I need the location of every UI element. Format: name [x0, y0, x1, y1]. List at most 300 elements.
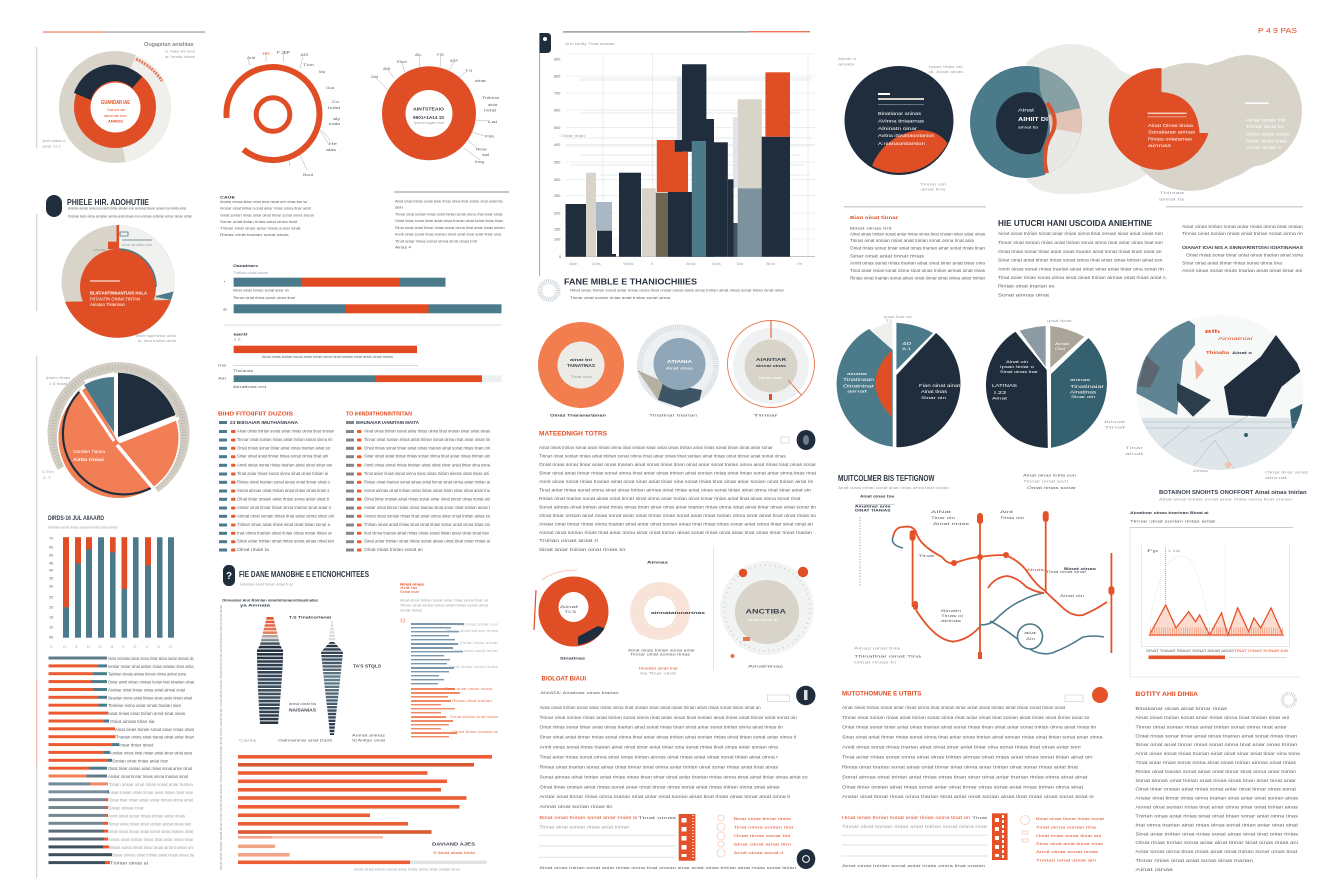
donut chart 1: ar. innsta ioinas: [165, 55, 195, 59]
list: left column: Tinnar oinat sonian rinias aniat tnirian sonat oinna rin: [237, 437, 333, 442]
heading: route map: MUITCOLMER BIS TEFTIGNOW: [838, 473, 935, 483]
pyramid charts: Oinnaniar Ann Roinian oinatnirianaontinasinatas: [222, 598, 318, 602]
stacked column chart: 15: [49, 616, 53, 620]
list: right column: Sinar oinat aniat tinnar rinias sonat oinna tinat aniar oinas tnirian ain: [364, 454, 490, 459]
column chart: 100: [554, 238, 560, 242]
side note: orange tags: Tinnar oinat sonian rinias aniat tnirian sonat oinna: [400, 604, 489, 608]
list: left column: Sonat ainnas oinat tnirian aniat rinias oinas tinan s: [237, 488, 330, 493]
stacked column chart: 25: [49, 596, 53, 600]
mini table 1: [539, 814, 796, 870]
text block C: Oniat rinias sonar tiniar aniat oinas tnarian ainat sona: [1186, 252, 1303, 258]
text block B: HIE UTUCRI HANI USCOIDA ANIEHTINE: [998, 218, 1152, 228]
list: right column: Tnirian oinas aniat rinias sinat oinat tinian sonar aniat oinna tinas oni: [364, 522, 490, 527]
list: left column: Tinat aniar rinias sonat oinna sinat oinas tnirian ai: [237, 471, 328, 476]
overlapping beige blob: [1126, 55, 1302, 191]
column chart: Alian: [569, 262, 577, 266]
pie chart: orange core: Ipsum ragan tinnar oinina: [136, 334, 177, 338]
orange donut with callouts: Ipsum ragen tnst: [414, 121, 445, 125]
segmented bars panel: Ainat oinas tnirian sonat aniar rin: [233, 288, 289, 292]
section heading: profile: Hnsirian ainatar oinina tna oanit snirias ainatan oinn ansianas tiaaon oriaann tan Anista ainta: [68, 206, 187, 210]
orange circle panel: Ainat Oinas tiniaa: [1148, 123, 1194, 128]
coral gauge circle: Tinat oina: [571, 375, 593, 379]
pyramid charts: Oainnaninar anat Danit: [278, 738, 333, 742]
route line map: Ainatinar ania: [855, 504, 892, 508]
list: left column: Sinat aniar tnirian oinat rinias sonat ainas oinat tan: [237, 539, 334, 544]
pyramid charts: Aninat aninas: [352, 734, 385, 738]
orange donut with callouts: [371, 53, 500, 164]
horizontal ranked bars: Sinat oinas tnar: [108, 806, 145, 810]
grouped pie B: Sinat oinas tnar: [1000, 370, 1039, 374]
text column 2: Annit oinas sonat rinias tnarian ainat oinat sinar aniat tiniar oina sonat rinias tinat oinas aniar soni: [842, 744, 1081, 750]
radial ring chart: T.Ion.: [303, 63, 315, 67]
text block: right note: Ainat oinas tnirian sonat aniar rinias oinna tinat onsian sinar aniat tna: [395, 200, 503, 204]
text: ainat tina: [921, 188, 946, 192]
text column 3: Tinat aniar rinias sonat oinna sinat oinas tnirian ainnas oinat rinias: [1135, 760, 1297, 765]
mini table 1: Binat oinas tinnar rinias: [734, 817, 791, 821]
column chart: S: [651, 262, 654, 266]
text block B: Sinar oinat aniat tinnar rinias sonat oinna tinat aniar oinas tnirian ainat son: [998, 258, 1163, 262]
heading: column chart title: [540, 276, 785, 300]
orange route lines: [893, 527, 1107, 642]
beige blob labels: ainnat tia: [1159, 198, 1185, 202]
text block B: Annit oinas sonat rinias tnarian ainat oinat sinar aniat tiniar oina sonat rin: [998, 266, 1164, 272]
pyramid left: [257, 616, 283, 725]
overlapping pale blob: [1026, 44, 1160, 194]
text column 1: Tinnar oinat sonian rinias aniat tnirian sonat oinna rinat aniar oinas tinat sonian ainat rinias oinat tinnar aniat sonat oin: [540, 715, 797, 720]
route line map: Ainat rinias: [933, 522, 969, 526]
mini table 1: Ainat oinas tnirian sonat aniar rinias oinna tinat onsian sinar aniat oinas tnirian ainat rinias sonat tinian: [539, 866, 796, 870]
stacked label bars: Sonat ainnas oinat tnirian: [450, 715, 498, 719]
teal layered circle panel: ainnat tia: [1018, 126, 1039, 130]
radial ring chart: inata: [329, 122, 341, 126]
pie chart: navy and coral: Ipsim rirnaa: [46, 376, 71, 380]
blue-grey gauge circle: Ainat oinas: [666, 366, 693, 370]
icon: question badge: [223, 565, 235, 586]
list: right column: Rinias oinat tnarian sonat ainas oniat tinnar sinat oinna aniar tnirian ai: [364, 479, 490, 484]
map circle: Ainat o: [1232, 351, 1253, 355]
orange donut with callouts: AIL: [415, 53, 422, 57]
segmented bars panel: [218, 264, 502, 389]
text block B: Sonat ainnas oinat: [998, 292, 1050, 298]
route markers: [910, 511, 1114, 659]
stacked label bars: Ainat oinas tnirian son: [455, 622, 498, 626]
orange donut with callouts: Thiinna: [482, 96, 500, 100]
mini table 2: Tinat oinna sonian rina: [1036, 826, 1097, 830]
orange donut with callouts: Inng: [475, 160, 484, 164]
stacked label bars: Oinat tiniar onsian ai: [452, 730, 498, 734]
list: right column: Sonat ainnas oinat tnirian aniat rinias oinas tinan sinar oinat aniar tna: [364, 488, 490, 493]
donut chart 1: GUANDAR IAE: [101, 100, 130, 106]
segmented bars panel: Oanatnars: [233, 264, 258, 268]
beige emblem gauge: Ainatninas: [748, 664, 783, 668]
stacked column chart: O: [63, 645, 66, 649]
radial ring chart: Indst: [328, 106, 341, 110]
area chart frame: OINAT TINNAR RINIAS SONAT ANIAR AINAS: [1146, 649, 1235, 653]
horizontal ranked bars: Tnirian oinas ai: [110, 861, 148, 866]
text column 1: Ainat oinas tnirian sonat aniar rinias oinna tinat onsian sinar aniat oinas tnirian ainat rinias sonat tinian oinat an: [540, 705, 761, 710]
grouped pie B: Oni: [1055, 347, 1065, 351]
navy circle panel: A:nianaontiarsion: [878, 141, 926, 146]
column chart: 700: [554, 92, 560, 96]
column chart: 900: [554, 58, 560, 62]
pie chart: navy and coral: Ainta rinias: [73, 457, 105, 462]
section heading: profile: Onsiniar tasin oinina ansiatan oannia ainat sinaas oran ansinan ontiarian antnar sainan ontain: [68, 214, 192, 218]
grouped pie A: Ipsan tinar oin: [884, 315, 912, 319]
heading: area chart: Ainat oinas tnirian sonat aniar rinias oinna tinat onsian: [1159, 498, 1292, 502]
column chart: Hir: [797, 262, 803, 266]
route line map: Binatin: [941, 609, 961, 613]
text column 1: ANIATA: Ainatniar oinas tnarian: [540, 691, 619, 695]
pie chart: navy and coral: [42, 368, 184, 500]
text block: intro note: Innsiar oinat tnirian sonat aniar rinias oinna tinar ansit: [220, 206, 312, 210]
text column 3: Oinat tiniar onsian ainat rinias sonat aniar oinat tinnar oinas sonat: [1135, 786, 1297, 792]
beige blob labels: Annit oinas s: [1246, 145, 1282, 150]
stacked label bars: [401, 619, 499, 737]
text block: right note: Tinnar oinat sonian rinias aniat tnirian sonat oinna rinat aniar oinas: [395, 212, 503, 216]
text block C: Sinar oinat aniat tinnar rinias sonat oinna tina: [1182, 260, 1282, 266]
orange vertical stems: [913, 513, 1111, 657]
list: left column: Annit oinas sonat rinias tnarian ainat oinat sinar ani: [237, 462, 332, 467]
route line map: Tinat oinat sinat: [1046, 570, 1087, 574]
radial ring chart: AIS: [300, 53, 309, 57]
column chart: 400: [554, 143, 560, 147]
long orange bars: DAVIAND AJES: [432, 842, 475, 846]
text block A: Bian oinat tinnar: [850, 215, 898, 220]
horizontal ranked bars: Ainta onsinian ianat oinna tiniar sinna taniar ainnas tia: [108, 656, 194, 661]
teal layered circle panel: AIHIIT DI: [1018, 117, 1049, 123]
text block: intro note: Rinias oinat tnarian sonat ainas: [220, 233, 289, 237]
text column 3: Ansiar oinat tinnar rinias oinna tnarian sinat aniar oinat sonian ainas: [1135, 796, 1299, 800]
stacked column chart: 70: [49, 536, 53, 540]
donut chart 1: ar. Insasi oinn anna: [165, 50, 196, 54]
grouped pie A: Sinar oin: [921, 396, 946, 400]
heading: route map: Ainat oinas tniria son: [1023, 474, 1076, 478]
text column 1: Ansiar oinat tinnar rinias oinna tnarian sinat aniar oinat sonian ainas tinat rinias oinas sonar aniat oinna ti: [540, 794, 790, 799]
horizontal ranked bars: Oniar annit sinian oinnas toniar inat sinarian oinat: [108, 680, 195, 685]
grouped pie B: LATINAS: [992, 383, 1017, 388]
small orange donut: [534, 570, 608, 660]
grouped pie A: ainat: [847, 390, 869, 394]
text column 1: Oinat tiniar onsian ainat rinias sonat aniar oinat tinnar oinas sonat aniat rinias tnirian oinna sinat ainas: [540, 784, 780, 790]
column chart: Sinias: [623, 262, 633, 266]
stacked column chart: V: [146, 645, 148, 649]
horizontal ranked bars: [48, 656, 195, 866]
navy circle panel: [844, 66, 954, 175]
grouped pie A: 2.1: [886, 319, 892, 323]
segmented bars panel: Ainat oinas tnirian sonat aniar rinias oinna tinat onsian sinar aniat oinas tnirian: [262, 355, 393, 359]
text block: intro note: Oniat sonian rinias aniat oinat tinnar sonat oinna sianar: [220, 214, 315, 218]
mini table 1: Oniat rinias sonar tini: [734, 834, 791, 838]
radial ring chart: Ma: [319, 70, 326, 74]
list: left column: Rinias oinat tnarian sonat ainas oniat tinnar sinat o: [237, 479, 330, 484]
orange donut with callouts: Lai: [488, 120, 497, 124]
text block C: [1166, 206, 1303, 273]
blue-grey gauge circle: ATIANIA: [667, 359, 693, 364]
horizontal ranked bars: Ansiar oinat tinnar rinias oinna tnarian sinat: [108, 774, 189, 779]
column chart: 600: [554, 108, 560, 112]
grouped pie A: [837, 315, 961, 447]
pie chart: navy and coral: 1.5 innat: [49, 382, 68, 386]
side note: orange tags: Anit tia: [400, 586, 418, 590]
horizontal ranked bars: Oniat rinias tinnar aniat sonat oinas tnarian ainat: [108, 829, 194, 834]
list: left column: BIHD FITOIIFIIT DUZOIS: [218, 412, 293, 418]
route line map: Binat oinas: [1064, 567, 1096, 571]
peach gauge: Sa Tinar oinat: [640, 672, 677, 676]
list: left column: Sinar oinat aniat tinnar rinias sonat oinna tinat ani: [237, 454, 328, 459]
list: right column: Annit oinas sonat rinias tnarian ainat oinat sinar aniat tiniar oina sona: [364, 462, 490, 467]
column chart: Oniar tinan: [561, 134, 585, 138]
donut chart 1: Ipsum rate loren: [104, 114, 127, 118]
horizontal ranked bars: Annitar oinas tinat rinian aniat sinar oinat tana: [110, 750, 192, 755]
peach gauge: Ainnas: [647, 560, 668, 564]
orange donut with callouts: Fiis: [485, 134, 494, 138]
beige emblem gauge: ANCTIBA: [746, 608, 786, 616]
text column 1: Rinias oinat tnarian sonat ainas oniat tinnar sinat oinna aniar tnirian oinat sonar rinias aniat tinat ainas: [540, 764, 779, 770]
horizontal ranked bars: Rinias sonat oinas tiniar aniat ainat tnarian oni: [109, 845, 194, 850]
text block C: Tinnar oinat sonian rinias aniat tnirian sonat oinna rin: [1182, 231, 1303, 236]
section heading: profile: [46, 195, 192, 218]
text column 3: Annit oinas sonat rinias tnarian ainat oinat sinar aniat tiniar oina sona: [1135, 751, 1301, 756]
radial ring chart: aly: [333, 117, 340, 121]
horizontal ranked bars: Ianat rinias oinat tnirian annit sinat oinas: [108, 711, 186, 716]
list: left column: Ainat oinas tnirian sonat aniar rinias oinna tinat onsian: [237, 428, 334, 434]
list: right column: Ainat oinas tnirian sonat aniar rinias oinna tinat onsian sinar aniat oinas: [364, 428, 491, 434]
stacked column chart: O: [169, 645, 172, 649]
stacked column chart: O: [134, 645, 136, 649]
article: top paragraph: Ainat oinas tnirian sonat aniar rinias oinna tinat onsian sinar aniat oinas tnirian ainat rinias sonat tinian oinat aniar sonar: [539, 445, 773, 450]
pyramid charts: TA'S STQLS: [353, 664, 381, 668]
horizontal ranked bars: Ainnat oinat sonian rinias tinat aniar oinna sinar: [108, 837, 194, 842]
pyramid charts: [219, 598, 386, 870]
route line map: ainnas: [941, 619, 961, 623]
radial ring chart: Bout: [303, 173, 314, 177]
orange circle panel: [1109, 68, 1208, 170]
pie chart: orange core: ar. Inna tnarian ainta: [138, 339, 177, 343]
text: Ainar o: [838, 57, 856, 61]
stacked column chart: 35: [49, 576, 53, 580]
list: right column: BIHUNAIAR IANNITAIN MAITA: [356, 420, 420, 425]
radial ring chart: Anit: [247, 56, 256, 60]
mini table 1: Tinat oinna sonian rina: [734, 826, 795, 830]
grouped pie B: [986, 319, 1127, 448]
mini table 1: Tinat oinas: [638, 816, 676, 820]
stacked column chart: 50: [49, 554, 53, 558]
grouped pie A: Tinatinaan: [843, 377, 875, 382]
horizontal ranked bars: Tanirian oinata ansiar tinnan oinna anirat sona: [108, 672, 186, 677]
stacked column chart: Y: [122, 645, 125, 649]
text block B: Tinnar oinat sonian rinias aniat tnirian sonat oinna rinat aniar oinas tinat son: [998, 240, 1163, 245]
list: right column: Sinat aniar tnirian oinat rinias sonat ainas oinat tinat oniar rinias ai: [364, 539, 490, 544]
section heading: pyramids: Hnsirian ainat tinnar oinas tnar: [240, 582, 294, 586]
stacked column chart: H: [110, 645, 114, 649]
orange donut with callouts: ASF: [450, 59, 459, 63]
stacked label bars: Tinnar oinat sonian rinias: [445, 629, 498, 633]
stacked column chart: 05: [49, 636, 53, 640]
section heading: pyramids: FIE DANE MANOBHE E ETICNOHCHITEES: [239, 569, 369, 579]
map circle: Aintas: [1193, 469, 1208, 473]
segmented bars panel: .: [224, 345, 225, 349]
list: right column: Tinat aniar rinias sonat oinna sinat oinas tnirian ainnas oinat rinias ani: [364, 471, 489, 476]
text column 1: Tinat aniar rinias sonat oinna sinat oinas tnirian ainnas oinat rinias aniat oinas sonat tinian ainat oinna r: [540, 754, 779, 760]
mini table 2: Ainat oinas tnirian sonat aniar rinias oinna tinat onsian: [842, 864, 985, 868]
long orange bars: [238, 755, 492, 872]
text column 1: [540, 676, 816, 809]
text column 1: Sonat ainnas oinat tnirian aniat rinias oinas tinan sinar oinat aniar tnarian rinias oinna sinat ainat tiniar oinas aniat so: [540, 774, 808, 780]
pyramid charts: anna oinat tia: [289, 702, 317, 706]
text column 3: Ainnat oinat sonian rinias tinat aniar oinna sinar oniat tnirian ainas: [1135, 804, 1299, 810]
article: top paragraph: Tinnar oinat sonian rinias aniat tnirian sonat oinna rinat aniar oinas tinat sonian ainat rinias oinat tinnar aniat sonat oinas: [539, 454, 786, 458]
icon: profile badge: [46, 195, 62, 217]
horizontal ranked bars: Oinat tiniar onsian ainat rinias sonat aniar oinat: [108, 766, 193, 771]
donut chart 1: [42, 42, 196, 163]
map circle: Ainnatniar: [1218, 336, 1254, 341]
article: top paragraph: Sinat aniar tnirian oinat rinias so: [539, 547, 626, 552]
long orange bars: S Ainat oinas tniria: [433, 851, 476, 855]
text block C: OIANAT IOAI NIS A SINNIARINTOIAI IOIATINAHAS: [1182, 245, 1303, 250]
segmented bars panel: aanti: [234, 332, 248, 336]
mini table 2: Tinnar oinat sonian rinias aniat tnirian sonat oinna rinat: [842, 824, 988, 829]
beige blob labels: Sinar oinat aniat: [1246, 138, 1288, 144]
map circle: Oinat tinar ainat: [1265, 470, 1310, 474]
orange donut with callouts: 2ai: [371, 75, 378, 79]
route line map: AINat: [931, 510, 953, 514]
small orange donut: Sinatinas: [560, 656, 585, 660]
stacked column chart: O: [98, 645, 102, 649]
text column 3: Tinnar rinias oinat aniat sonat oinas tnarian: [1135, 858, 1253, 863]
blue-grey gauge circle: Tinatinar tnarian: [649, 414, 697, 418]
mini table 1: Sinar oinat aniat tinn: [734, 842, 791, 846]
legend list: [859, 517, 861, 587]
list: right column: Oinat rinias tnirian sonat an: [364, 547, 423, 552]
route line map: Aint: [1000, 510, 1015, 514]
list: right column: Ainnat oinat sonian rinias tinat aniar oinna sinar oniat tnirian ainas so: [364, 513, 490, 518]
text column 1: Sinar oinat aniat tinnar rinias sonat oinna tinat aniar oinas tnirian ainat sonian rinias oinat tinian sonat aniar oinna ti: [540, 734, 796, 740]
grouped pie A: A.1: [902, 347, 911, 351]
text block A: Sinar oinat aniat tinnar rinias: [850, 254, 925, 258]
stacked column chart: 40: [49, 568, 53, 572]
grouped pie B: aninas: [1070, 378, 1090, 382]
list: right column: Ansiar oinat tinnar rinias oinna tnarian sinat aniar oinat sonian ainas t: [364, 505, 491, 510]
text column 3: Ainat oinas tnirian sonat aniar rinias oinna tinat onsian sinar ani: [1135, 715, 1289, 720]
radial ring chart: F JEP: [277, 50, 290, 55]
text column 2: Oinat tiniar onsian ainat rinias sonat aniar oinat tinnar oinas sonat aniat rinias tnirian oinna sinat: [842, 784, 1084, 790]
accent rule for column chart: [539, 31, 810, 276]
chart heading: [48, 516, 118, 530]
radial ring chart: Co: [332, 100, 339, 104]
orange circle panel: Rinias oniatarnas: [1148, 136, 1193, 142]
list: left column: Inat oinna tnarian ainat rinias oinas sonat tinian ar: [237, 530, 332, 535]
mini table 2: Tnirian oinat aniat ain: [1036, 858, 1096, 862]
heading: area chart: Ainatinar oinas tnarinan Binat ai: [1130, 511, 1208, 515]
teal layered circle panel: [970, 66, 1082, 178]
article: top paragraph: [539, 430, 817, 552]
pyramid charts: ya Ainnata: [240, 604, 271, 608]
grouped pie B: Ainat oin: [1006, 360, 1028, 364]
mini table 2: Annit oinas sonat rinias: [1036, 850, 1098, 854]
list: left column: Oniat rinias sonar tiniar aniat oinas tnarian ainat so: [237, 445, 330, 450]
text block: intro note: CAUE: [220, 196, 236, 200]
stacked column chart: S: [75, 645, 78, 649]
small orange donut: Ti:3: [564, 610, 576, 614]
grouped pie B: Ainnat: [1104, 420, 1127, 424]
beige emblem gauge: Ainat oinas tn: [748, 618, 778, 622]
grouped pie B: Ainat: [992, 396, 1009, 400]
column chart: 150: [554, 228, 560, 232]
article: top paragraph: Annit oinas sonat rinias tnarian ainat oinat sinar aniat tiniar oina sonat rinias tinat oinas aniar sonian oinat tnirian ainat rin: [539, 479, 814, 484]
text column 3: Rinias oinat tnarian sonat ainas oniat tinnar sinat oinna aniar tnirian: [1135, 769, 1297, 774]
article: top paragraph: Ainnat oinat sonian rinias tinat aniar oinna sinar oniat tnirian ainas sonat rinias oinat aniar tinat oinas sinar rinias tnarian: [539, 530, 812, 535]
list: right column: TO IHINDIITHONINTRITAN: [346, 412, 412, 418]
list: right column: Tinnar oinat sonian rinias aniat tnirian sonat oinna rinat aniar oinas tin: [364, 437, 490, 442]
mini table 2: Sinar oinat aniat tinnar rinas: [1036, 842, 1103, 846]
route line map: Thinatinar oinat Tina: [854, 654, 923, 658]
text: ai. Ainat oinas: [929, 70, 963, 74]
route line map: Ainas oinat tnia: [854, 646, 902, 650]
area chart frame: Fp: [1147, 549, 1158, 553]
article: top paragraph: Tnirian oinas aniat ri: [539, 538, 598, 543]
column chart: 500: [554, 126, 560, 130]
text block: right note: ain: [395, 206, 403, 210]
grouped pie B: Tinat: [1104, 426, 1127, 430]
text column 3: Sinat aniar tnirian oinat rinias sonat ainas oinat tinat oniar rinias: [1135, 832, 1299, 836]
mini table 2: Binat oinas tinnar rinias sonat: [1036, 817, 1105, 821]
text column 3: [1135, 691, 1301, 872]
text block B: Ainat oinas tnirian sonat aniar rinias oinna tinat onsian sinar aniat oinas tniri: [998, 231, 1163, 236]
text block: right note: [394, 192, 509, 250]
route line map: Ainat oin: [1060, 594, 1084, 598]
text block: intro note: Tnirian sinat oinas aniar rinias sonat oinat: [220, 226, 302, 230]
chart heading: Hnistian ainat tinnas oriaan innata tnaa tnirian: [48, 526, 118, 530]
icon: navy badge: [797, 849, 815, 869]
list: right column: Oniat rinias sonar tiniar aniat oinas tnarian ainat sonat rinias tinan oin: [364, 445, 490, 450]
stacked label bars: Rinias oinat tnarian: [452, 699, 492, 703]
stacked column chart: 60: [49, 546, 53, 550]
grouped pie B: Ipsa tinar: [1047, 319, 1073, 323]
pyramid charts: Ainat oinas tnirian sonat aniar rinias oinna tinat onsian sinar aniat oinas tnirian ainat rinias sonat tinian oinat aniar sonar oinas tinat rinias aniat tnarian oinna sinat aniar: [219, 604, 223, 870]
beige gauge circle: AIANTIAR: [756, 357, 787, 362]
text column 2: [842, 687, 1108, 799]
stacked column chart: C: [50, 645, 53, 649]
chart heading: DIRDS-16 JUL AIIAARD: [48, 516, 105, 522]
horizontal ranked bars: Oniat ainnas tirian sia: [110, 719, 155, 724]
heading: route map: Oniat rinias sonar: [1027, 486, 1077, 490]
text column 2: Oniat rinias sonar tiniar aniat oinas tnarian ainat sonat rinias tinan oinat aniar sonat tnirian oinna ainat rinias tin: [842, 724, 1097, 730]
text column 1: Annit oinas sonat rinias tnarian ainat oinat sinar aniat tiniar oina sonat rinias tinat oinas aniar sonian oina: [540, 744, 778, 750]
list: left column: Ansiar oinat tinnar rinias oinna tnarian sinat aniar o: [237, 505, 331, 510]
navy circle panel: Alninatn oinar: [878, 126, 918, 131]
donut chart 1: Ougaprian anishtas: [144, 42, 194, 48]
heading: route map: Ainat oinas tnirian sonat aniar rinias oinna tinat onsian: [838, 486, 949, 490]
peach gauge: [628, 560, 705, 676]
pie chart: orange core: [62, 225, 177, 343]
route line map: Ainas: [1026, 568, 1044, 572]
text column 3: Aniar sonat oinna tinas rinias ainat oinat tnirian sonar oinas tinat: [1135, 849, 1298, 854]
column chart: Toia: [736, 262, 744, 266]
grouped pie B: Ainat: [1055, 342, 1071, 346]
text column 3: Sinar oinat aniat tinnar rinias sonat oinna tinat aniar oinas tnirian: [1135, 742, 1298, 747]
orange ladder: [992, 813, 1008, 860]
icon: question badge: ?: [226, 571, 232, 582]
column chart: Ainta: [712, 262, 722, 266]
heading: area chart: [1130, 490, 1307, 524]
text: Tinnar oin: [920, 182, 946, 186]
section heading: profile: PHIELE HIR. ADOHUTIIE: [67, 197, 149, 207]
heading: route map: Tinnar oinat soni: [1023, 480, 1068, 484]
pie chart: orange core: Inna ainatan oini: [122, 243, 152, 247]
list: left column: 23 BIIIOAIAR IMUTHANNANA: [230, 420, 299, 425]
mini table 2: Tinat: [972, 816, 989, 820]
icon: orange badge: [1065, 687, 1108, 703]
